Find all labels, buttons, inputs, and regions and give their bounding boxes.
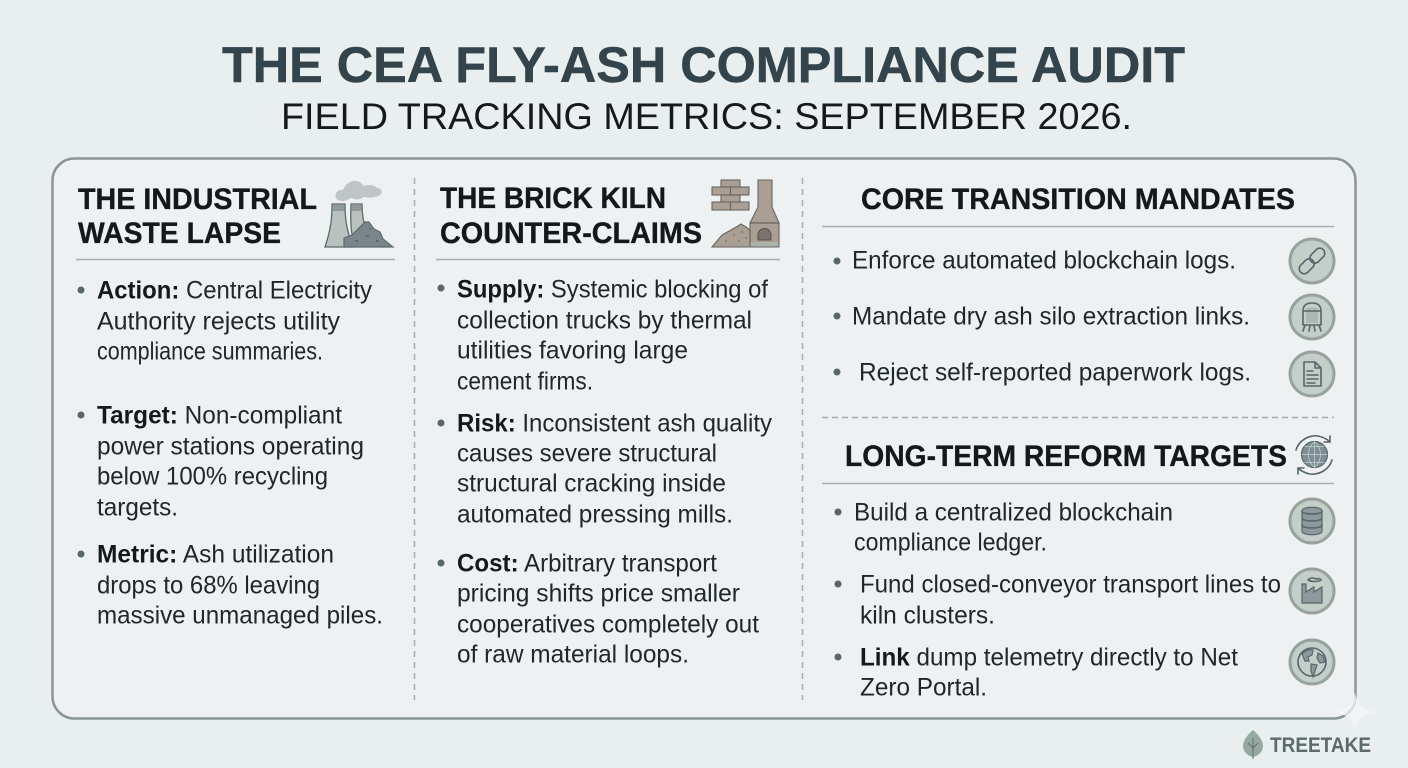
list: mandates: Reject self-reported paperwork logs. [859,358,1251,386]
list: mandates: Enforce automated blockchain logs. [852,246,1236,274]
watermark logo: treetake: TREETAKE [1270,734,1371,757]
icon: cooling towers and ash pile [325,181,393,247]
icon: factory [1290,569,1334,613]
list: action, target, metric: Authority rejects utility [97,308,340,336]
icon: bricks and kiln [712,180,779,247]
icon: document [1290,352,1334,396]
list: mandates [834,246,1251,386]
heading: the industrial waste lapse: THE INDUSTRIAL [78,183,317,216]
icon: database [1290,499,1334,543]
list: supply, risk, cost: Risk: Inconsistent ash quality [457,410,772,438]
list: supply, risk, cost: automated pressing mills. [457,500,733,528]
list: reform targets: Link dump telemetry directly to Net [860,644,1238,672]
list: reform targets: kiln clusters. [860,602,995,630]
list: supply, risk, cost: cooperatives completely out [457,610,759,638]
list: action, target, metric: power stations operating [97,432,364,460]
watermark logo: treetake [1243,730,1371,759]
list: supply, risk, cost: utilities favoring large [457,336,688,364]
list: action, target, metric: massive unmanaged piles. [97,602,383,630]
list: supply, risk, cost: pricing shifts price smaller [457,580,740,608]
watermark sparkle [1334,692,1376,732]
title: THE CEA FLY-ASH COMPLIANCE AUDIT [222,36,1185,93]
heading: the industrial waste lapse [78,183,317,250]
list: supply, risk, cost: of raw material loops. [457,640,689,668]
list: action, target, metric: compliance summaries. [97,338,323,366]
list: action, target, metric: Action: Central Electricity [97,276,372,304]
panel: long-term reform targets [822,436,1334,702]
list: supply, risk, cost: Supply: Systemic blocking of [457,276,768,304]
list: supply, risk, cost: causes severe structural [457,440,717,468]
panel: industrial waste lapse [76,181,395,630]
list: reform targets: Zero Portal. [860,674,987,702]
list: supply, risk, cost: cement firms. [457,368,593,396]
heading: the brick kiln counter-claims: COUNTER-CLAIMS [440,217,702,250]
icon: chain link [1290,239,1334,283]
list: reform targets: Build a centralized blockchain [854,498,1173,526]
main panel [52,158,1356,718]
list: supply, risk, cost: structural cracking inside [457,470,726,498]
heading: the brick kiln counter-claims [440,182,702,250]
list: reform targets: Fund closed-conveyor transport lines to [860,570,1281,598]
heading: long-term reform targets: LONG-TERM REFORM TARGETS [845,440,1287,473]
list: supply, risk, cost [438,276,772,668]
list: supply, risk, cost: collection trucks by thermal [457,306,752,334]
list: action, target, metric: drops to 68% leaving [97,572,320,600]
heading: core transition mandates: CORE TRANSITION MANDATES [861,183,1295,216]
list: mandates: Mandate dry ash silo extraction links. [852,302,1250,330]
panel: core transition mandates [822,183,1334,396]
icon: globe with cycle arrows [1296,436,1332,474]
list: action, target, metric: Metric: Ash utilization [97,540,334,568]
heading: the industrial waste lapse: WASTE LAPSE [78,217,281,250]
list: reform targets: compliance ledger. [854,528,1047,556]
list: supply, risk, cost: Cost: Arbitrary transport [457,550,717,578]
icon: earth [1290,640,1334,684]
icon: silo [1290,295,1334,339]
subtitle: FIELD TRACKING METRICS: SEPTEMBER 2026. [281,95,1132,137]
list: action, target, metric: below 100% recycling [97,462,328,490]
list: action, target, metric: Target: Non-compliant [97,402,342,430]
list: action, target, metric [78,276,383,630]
heading: the brick kiln counter-claims: THE BRICK KILN [440,182,666,215]
list: reform targets [834,498,1281,702]
panel: brick kiln counter-claims [436,180,780,668]
list: action, target, metric: targets. [97,494,178,522]
